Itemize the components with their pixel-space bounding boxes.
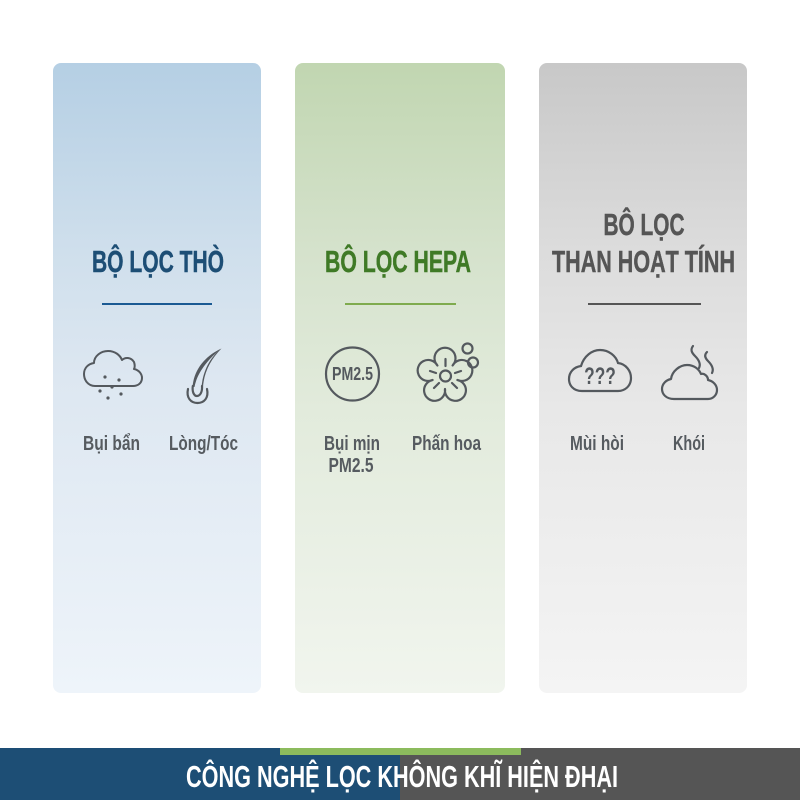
label: pollen: Phấn hoa xyxy=(412,433,482,455)
heading: HEPA filter: BÔ LỌC HEPA xyxy=(325,243,471,279)
heading: coarse filter: BỘ LỌC THÒ xyxy=(92,243,224,279)
footer title: CÔNG NGHỆ LỌC KHÔNG KHĨ HIỆN ĐHẠI xyxy=(186,758,618,794)
icon: pollen flower xyxy=(418,344,478,401)
divider: coarse filter xyxy=(102,303,212,305)
icon: PM2.5 xyxy=(326,348,379,400)
panel: HEPA filter xyxy=(295,63,505,693)
label: fine dust PM2.5: Bụi mịn xyxy=(324,433,380,455)
label: fine dust PM2.5: PM2.5 xyxy=(328,455,374,477)
icon: odor cloud: ??? xyxy=(584,363,616,390)
divider: HEPA filter xyxy=(345,303,456,305)
label: odor: Mùi hòi xyxy=(570,433,624,455)
divider: activated carbon filter xyxy=(588,303,701,305)
icon: odor cloud xyxy=(569,350,631,391)
icon: PM2.5: PM2.5 xyxy=(332,364,373,384)
icon: hair xyxy=(188,348,222,403)
icon: smoke cloud xyxy=(662,346,717,399)
panel: activated carbon filter xyxy=(539,63,747,693)
label: dust: Bụi bẩn xyxy=(83,433,140,455)
heading: activated carbon filter: BÔ LỌC xyxy=(604,206,684,242)
icon: dust cloud xyxy=(84,351,142,400)
label: hair: Lòng/Tóc xyxy=(169,433,238,455)
panel: coarse filter xyxy=(53,63,261,693)
label: smoke: Khói xyxy=(673,433,705,455)
footer banner xyxy=(0,748,800,800)
